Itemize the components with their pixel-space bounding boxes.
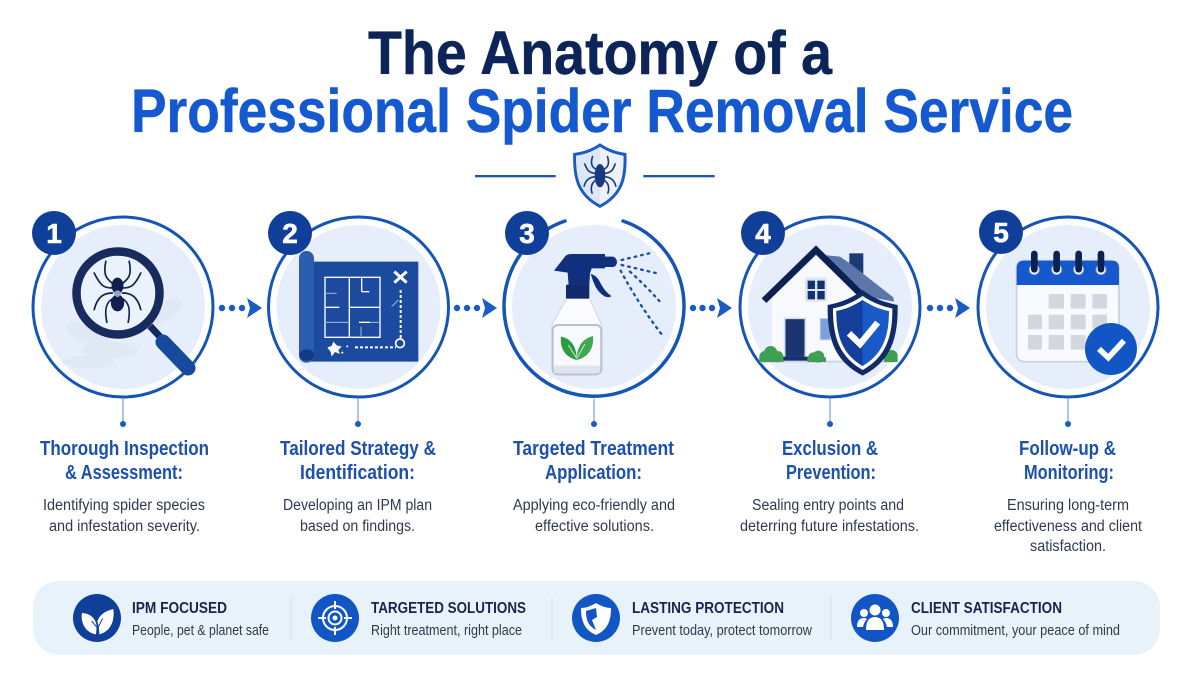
arrow 3 to 4: [690, 298, 732, 318]
benefit: targeted solutions: [311, 594, 526, 642]
icon: blueprint: [299, 251, 418, 363]
heading 2: Tailored Strategy &: [280, 438, 436, 460]
description 1: and infestation severity.: [49, 518, 200, 535]
panel: benefits bar: [33, 581, 1160, 655]
icon: calendar with check: [1017, 254, 1137, 375]
circle 3: [504, 221, 684, 396]
description 4: [740, 497, 919, 535]
benefit: IPM focused: [73, 594, 269, 642]
badge 1: [32, 211, 76, 255]
icon: spray bottle: [552, 252, 664, 374]
description 5: effectiveness and client: [994, 518, 1143, 535]
circle 4: [740, 217, 920, 397]
step 4: exclusion: [740, 211, 920, 535]
badge 2: [268, 211, 312, 255]
benefit: lasting protection: Prevent today, protect tomorrow: [632, 623, 812, 639]
step 1: inspection: [32, 211, 213, 535]
description 2: based on findings.: [300, 518, 415, 535]
benefit: targeted solutions: TARGETED SOLUTIONS: [371, 600, 526, 617]
connector 3: [591, 399, 597, 427]
badge 5: [979, 210, 1023, 254]
heading 5: Follow-up &: [1019, 438, 1116, 460]
benefit: lasting protection: LASTING PROTECTION: [632, 600, 784, 617]
heading 3: Targeted Treatment: [513, 438, 674, 460]
badge 4: 4: [755, 218, 771, 249]
badge 2: 2: [282, 218, 298, 249]
heading 1: & Assessment:: [65, 462, 183, 484]
description 2: [283, 497, 432, 535]
step 3: treatment: [504, 211, 684, 535]
connector 2: [355, 399, 361, 427]
circle 2: [268, 217, 448, 397]
title: [131, 19, 1073, 146]
description 1: Identifying spider species: [43, 497, 205, 514]
heading 5: [1019, 438, 1116, 484]
badge 1: 1: [46, 218, 62, 249]
circle 1: [33, 217, 213, 397]
step 5: follow-up: [978, 210, 1158, 555]
benefit: lasting protection: [572, 594, 812, 642]
badge 3: [505, 211, 549, 255]
benefit: client satisfaction: Our commitment, your peace of mind: [911, 623, 1120, 639]
connector 1: [120, 399, 126, 427]
heading 3: [513, 438, 674, 484]
description 4: Sealing entry points and: [752, 497, 904, 514]
arrow 1 to 2: [219, 298, 262, 318]
arrow 2 to 3: [454, 298, 497, 318]
heading 4: [782, 438, 878, 484]
benefit: IPM focused: People, pet & planet safe: [132, 623, 269, 639]
description 3: Applying eco-friendly and: [513, 497, 675, 514]
benefit: targeted solutions: Right treatment, right place: [371, 623, 522, 639]
badge 3: 3: [519, 218, 535, 249]
description 5: Ensuring long-term: [1007, 497, 1129, 514]
heading 3: Application:: [545, 462, 642, 484]
benefit: IPM focused: IPM FOCUSED: [132, 600, 227, 617]
badge 4: [741, 211, 785, 255]
description 3: effective solutions.: [535, 518, 654, 535]
heading 1: Thorough Inspection: [40, 438, 209, 460]
icon: magnifying glass with spider: [76, 252, 188, 368]
description 1: [43, 497, 205, 535]
heading 2: Identification:: [300, 462, 415, 484]
description 5: satisfaction.: [1030, 538, 1106, 555]
heading 4: Prevention:: [786, 462, 876, 484]
icon: spider shield emblem: [475, 145, 715, 206]
description 5: [994, 497, 1143, 555]
step 2: strategy: [268, 211, 448, 535]
connector 4: [827, 399, 833, 427]
badge 5: 5: [993, 217, 1009, 248]
connector 5: [1065, 399, 1071, 427]
icon: house with shield: [759, 250, 898, 376]
description 2: Developing an IPM plan: [283, 497, 432, 514]
faded foliage: [62, 294, 186, 368]
heading 4: Exclusion &: [782, 438, 878, 460]
benefit: client satisfaction: CLIENT SATISFACTION: [911, 600, 1062, 617]
description 4: deterring future infestations.: [740, 518, 919, 535]
title: Professional Spider Removal Service: [131, 77, 1073, 146]
arrow 4 to 5: [927, 298, 970, 318]
heading 5: Monitoring:: [1024, 462, 1114, 484]
title: The Anatomy of a: [368, 19, 833, 88]
description 3: [513, 497, 675, 535]
heading 1: [40, 438, 209, 484]
heading 2: [280, 438, 436, 484]
benefit: client satisfaction: [851, 594, 1120, 642]
circle 5: [978, 217, 1158, 397]
